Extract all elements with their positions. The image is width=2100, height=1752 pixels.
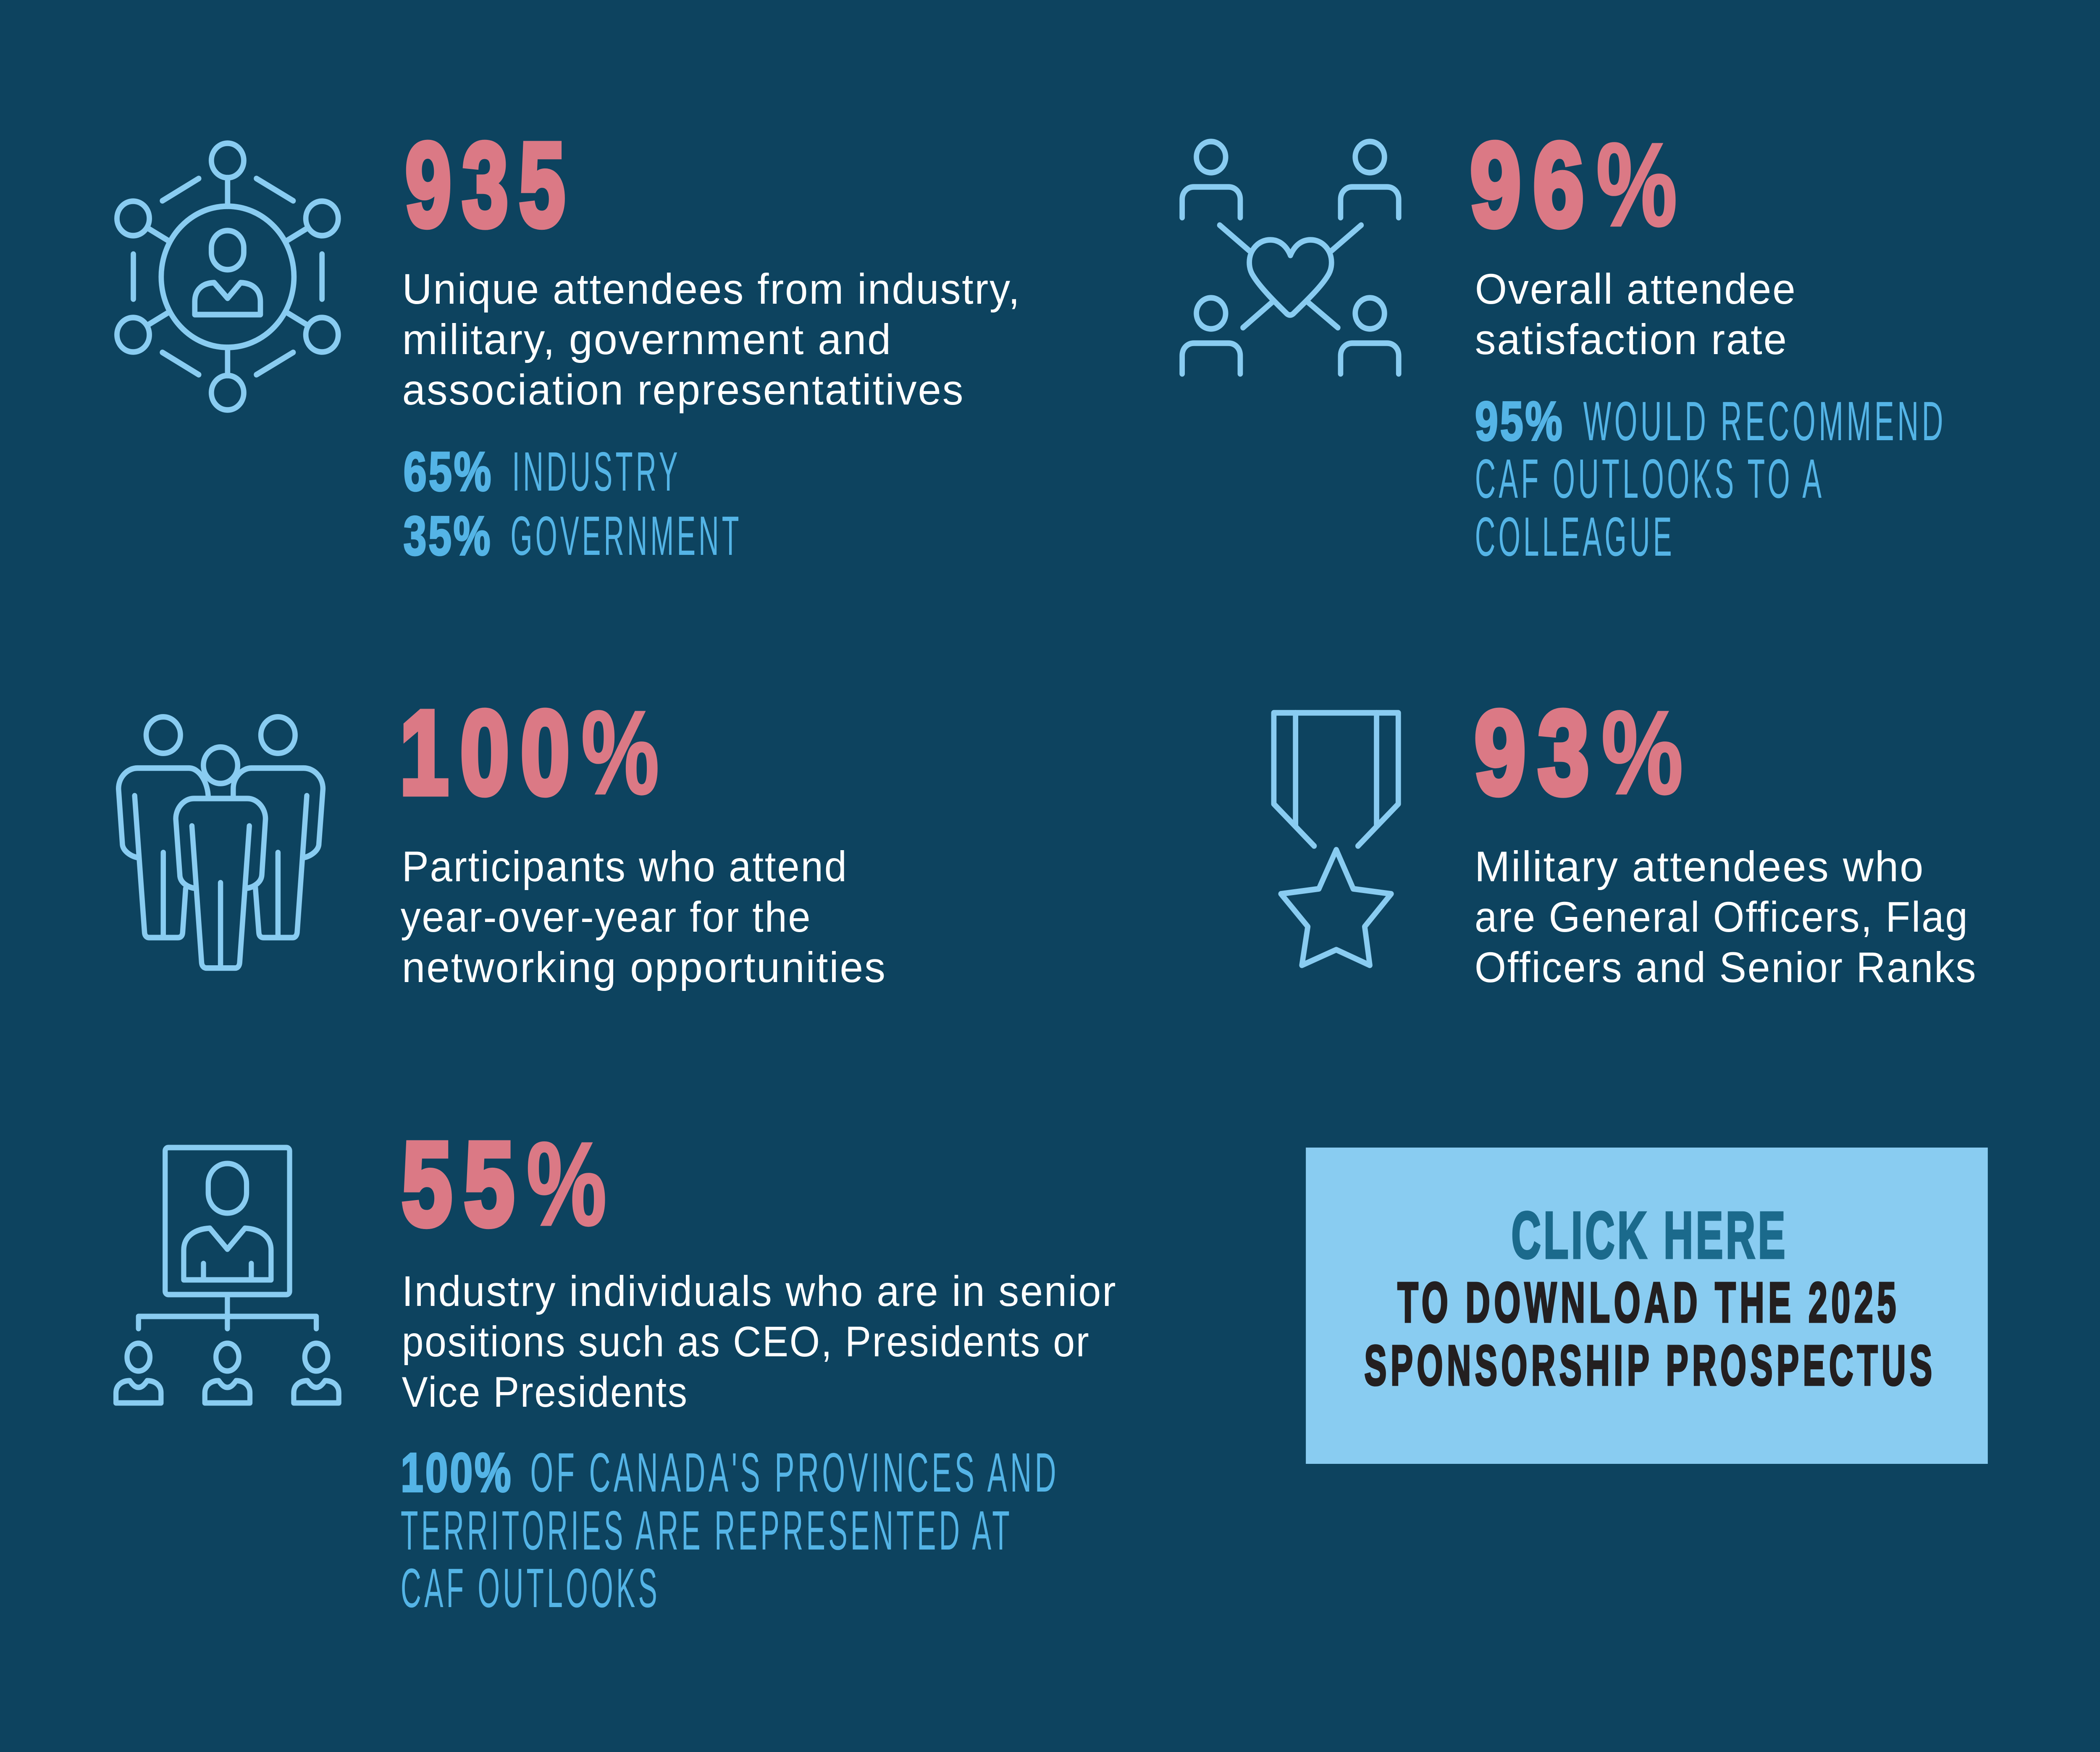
callout: provinces represented: CAF OUTLOOKS bbox=[401, 1558, 660, 1619]
icon: group of three people bbox=[118, 717, 323, 968]
callout: provinces represented: 100% bbox=[401, 1442, 513, 1504]
callout: would recommend bbox=[1475, 391, 1946, 568]
description: participants bbox=[401, 842, 887, 991]
description: satisfaction rate: satisfaction rate bbox=[1475, 315, 1788, 363]
stat: 55%: 55% bbox=[402, 1118, 619, 1250]
callout: would recommend: CAF OUTLOOKS TO A bbox=[1475, 448, 1824, 510]
description: satisfaction rate bbox=[1475, 265, 1797, 363]
description: senior positions: positions such as CEO, Presidents or bbox=[402, 1317, 1090, 1366]
panel: attendees bbox=[117, 119, 1021, 567]
breakdown: industry and government: GOVERNMENT bbox=[510, 505, 742, 567]
description: unique attendees: association representatitives bbox=[402, 365, 964, 414]
call to action button bbox=[1306, 1148, 1988, 1464]
panel: year-over-year participants bbox=[118, 687, 887, 991]
description: military attendees: are General Officers, Flag bbox=[1475, 893, 1969, 941]
callout: would recommend: COLLEAGUE bbox=[1475, 506, 1675, 568]
description: unique attendees: Unique attendees from industry, bbox=[402, 265, 1021, 313]
icon: people around heart bbox=[1182, 142, 1399, 374]
description: participants: networking opportunities bbox=[402, 943, 887, 991]
description: unique attendees bbox=[402, 265, 1021, 414]
stat: 100%: 100% bbox=[400, 687, 671, 819]
breakdown: industry and government: INDUSTRY bbox=[512, 441, 681, 503]
description: senior positions: Industry individuals who are in senior bbox=[402, 1267, 1117, 1315]
stat: 935: 935 bbox=[405, 119, 576, 251]
description: unique attendees: military, government and bbox=[402, 315, 892, 363]
icon: medal with star bbox=[1274, 713, 1398, 965]
icon: org chart bbox=[116, 1148, 339, 1403]
panel: satisfaction bbox=[1182, 119, 1946, 568]
stat: 93%: 93% bbox=[1475, 687, 1696, 819]
callout: provinces represented: OF CANADA'S PROVINCES AND bbox=[530, 1442, 1059, 1504]
icon: network of people bbox=[117, 143, 338, 410]
panel: military attendees bbox=[1274, 687, 1977, 991]
description: military attendees bbox=[1475, 842, 1977, 991]
description: participants: Participants who attend bbox=[402, 842, 848, 890]
description: participants: year-over-year for the bbox=[401, 893, 811, 941]
stat: 96%: 96% bbox=[1470, 119, 1690, 251]
description: senior positions: Vice Presidents bbox=[402, 1368, 688, 1416]
CTA heading: click here: CLICK HERE bbox=[1511, 1198, 1788, 1272]
description: satisfaction rate: Overall attendee bbox=[1475, 265, 1797, 313]
CTA text: download prospectus bbox=[1364, 1270, 1936, 1397]
callout: would recommend: 95% bbox=[1475, 391, 1564, 452]
breakdown: industry and government bbox=[403, 441, 742, 567]
description: military attendees: Military attendees who bbox=[1475, 842, 1924, 890]
breakdown: industry and government: 35% bbox=[403, 505, 492, 567]
description: senior positions bbox=[402, 1267, 1117, 1416]
panel: senior industry individuals bbox=[116, 1118, 1117, 1619]
breakdown: industry and government: 65% bbox=[403, 441, 493, 503]
description: military attendees: Officers and Senior Ranks bbox=[1475, 943, 1977, 991]
callout: provinces represented bbox=[401, 1442, 1059, 1619]
callout: provinces represented: TERRITORIES ARE REPRESENTED AT bbox=[401, 1500, 1013, 1562]
